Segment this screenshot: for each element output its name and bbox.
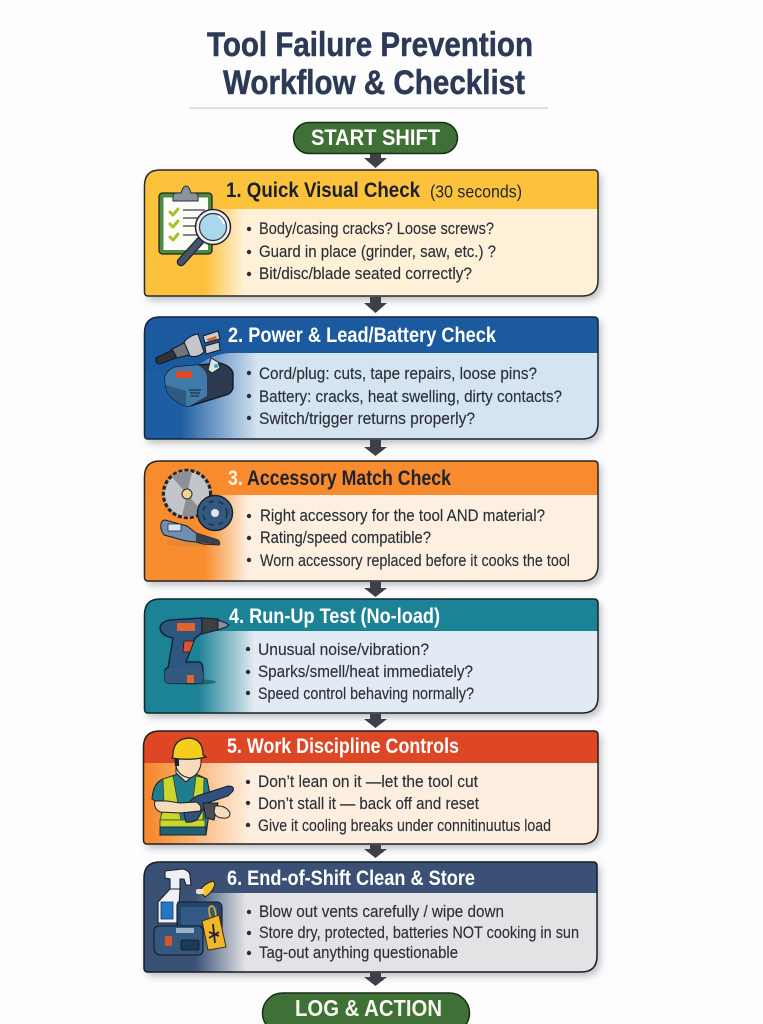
checklist: step 2: Switch/trigger returns properly? xyxy=(259,409,475,428)
icon: saw blade, disc and bit xyxy=(161,470,232,546)
checklist: step 4: Sparks/smell/heat immediately? xyxy=(258,662,473,681)
icon: clipboard and magnifier xyxy=(159,186,230,262)
title: Workflow & Checklist xyxy=(223,64,525,102)
heading: step 2: 2. Power & Lead/Battery Check xyxy=(228,323,496,347)
checklist: step 5: Don’t lean on it —let the tool cut xyxy=(258,772,478,791)
checklist: step 5: Don’t stall it — back off and reset xyxy=(258,794,479,813)
arrow: step 2 to step 3 xyxy=(364,440,387,456)
checklist: step 5 xyxy=(246,772,551,835)
panel: step 3 accessory match check xyxy=(144,461,598,581)
panel: step 6 clean and store xyxy=(144,862,597,972)
start pill xyxy=(294,122,458,154)
icon: cordless drill xyxy=(160,618,229,685)
heading: step 3: 3. Accessory Match Check xyxy=(228,466,451,490)
checklist: step 2: Battery: cracks, heat swelling, dirty contacts? xyxy=(259,387,562,406)
heading: step 4: 4. Run-Up Test (No-load) xyxy=(229,604,440,628)
checklist: step 1: Guard in place (grinder, saw, etc.) ? xyxy=(259,242,496,261)
checklist: step 6: Tag-out anything questionable xyxy=(259,943,458,962)
checklist: step 5: Give it cooling breaks under connitinuutus load xyxy=(258,816,551,835)
checklist: step 6 xyxy=(247,902,579,962)
heading: step 1: 1. Quick Visual Check xyxy=(226,178,420,202)
checklist: step 1: Bit/disc/blade seated correctly? xyxy=(259,264,472,283)
checklist: step 1 xyxy=(247,219,496,283)
icon: worker with drill xyxy=(152,738,233,835)
arrow: step 1 to step 2 xyxy=(364,297,387,313)
checklist: step 4 xyxy=(246,640,474,703)
checklist: step 4: Speed control behaving normally? xyxy=(258,684,474,703)
checklist: step 3: Rating/speed compatible? xyxy=(260,528,431,547)
arrow: step 4 to step 5 xyxy=(364,714,387,728)
heading: step 1: (30 seconds) xyxy=(430,182,522,202)
heading: step 6: 6. End-of-Shift Clean & Store xyxy=(227,866,475,890)
title xyxy=(207,26,533,102)
checklist: step 3 xyxy=(247,506,570,570)
checklist: step 2: Cord/plug: cuts, tape repairs, loose pins? xyxy=(259,364,537,383)
end pill: LOG & ACTION xyxy=(295,995,442,1021)
checklist: step 6: Store dry, protected, batteries NOT cooking in sun xyxy=(259,923,579,942)
panel: step 2 power and battery check xyxy=(144,317,598,439)
arrow: step 3 to step 4 xyxy=(364,582,387,597)
checklist: step 3: Right accessory for the tool AND material? xyxy=(260,506,545,525)
heading: step 5: 5. Work Discipline Controls xyxy=(227,734,459,758)
checklist: step 1: Body/casing cracks? Loose screws? xyxy=(259,219,494,238)
icon: spray bottle, rag, case, battery and tag xyxy=(154,869,226,955)
checklist: step 2 xyxy=(247,364,562,428)
checklist: step 6: Blow out vents carefully / wipe down xyxy=(259,902,504,921)
panel: step 4 run-up test xyxy=(144,599,598,713)
icon: plug and battery xyxy=(156,331,233,406)
arrow: step 6 to log xyxy=(364,973,387,986)
arrow: start to step 1 xyxy=(364,154,387,168)
end pill xyxy=(262,993,470,1024)
panel: step 1 quick visual check xyxy=(144,170,598,296)
checklist: step 3: Worn accessory replaced before it cooks the tool xyxy=(260,551,570,570)
arrow: step 5 to step 6 xyxy=(364,845,387,858)
start pill: START SHIFT xyxy=(311,125,441,150)
title: Tool Failure Prevention xyxy=(207,26,533,64)
checklist: step 4: Unusual noise/vibration? xyxy=(258,640,429,659)
panel: step 5 work discipline controls xyxy=(144,731,598,844)
